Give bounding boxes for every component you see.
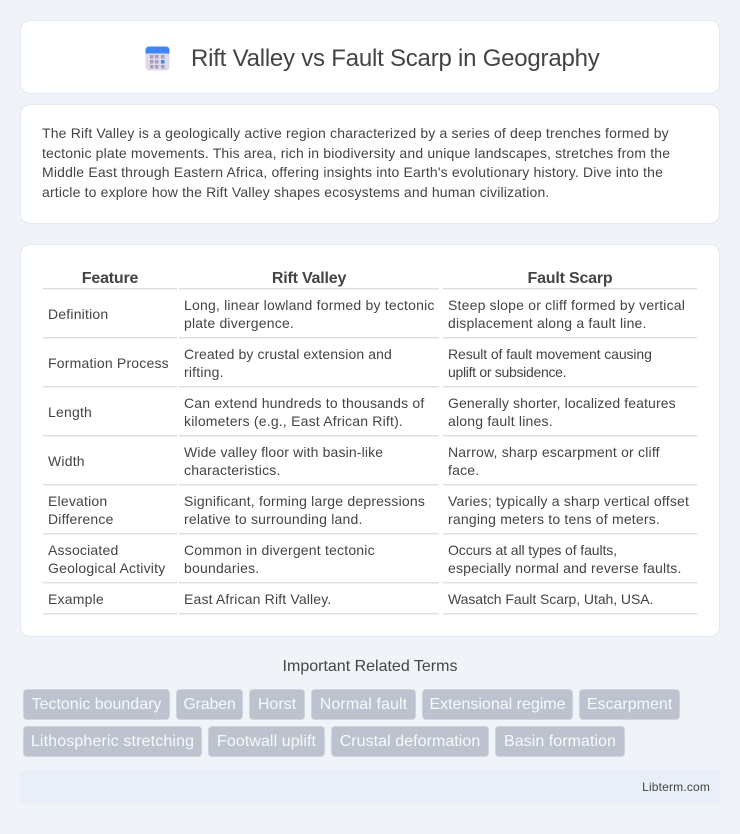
text block: introduction (42, 125, 670, 200)
title: Rift Valley vs Fault Scarp in Geography (191, 45, 600, 72)
text block: introduction: Middle East through Eastern Africa, offering insights into Earth's evolutionary history. Dive into the (42, 164, 663, 180)
tags: related terms (23, 689, 680, 757)
tag (249, 689, 305, 720)
panel: comparison table: relative to surrounding land. (184, 511, 363, 527)
panel: comparison table: Wide valley floor with basin-like (184, 444, 383, 460)
panel: comparison table: uplift or subsidence. (448, 364, 566, 380)
tag (311, 689, 416, 720)
footer (20, 770, 720, 804)
panel: comparison table: Common in divergent tectonic (184, 542, 375, 558)
panel: comparison table: Significant, forming large depressions (184, 493, 425, 509)
table heading: Fault Scarp: Fault Scarp (528, 270, 612, 287)
panel: comparison table: kilometers (e.g., East African Rift). (184, 413, 403, 429)
panel: comparison table: ranging meters to tens of meters. (448, 511, 660, 527)
tag: Crustal deformation (340, 733, 480, 750)
panel: comparison table (20, 244, 720, 637)
tag: Normal fault (320, 696, 407, 713)
heading: Important Related Terms: Important Related Terms (283, 658, 457, 675)
row: Associated Geological Activity: Geological Activity (48, 560, 165, 576)
icon: calendar (146, 46, 170, 70)
panel: comparison table: Wasatch Fault Scarp, Utah, USA. (448, 591, 653, 607)
row: Associated Geological Activity (48, 542, 166, 576)
tag: Lithospheric stretching (31, 733, 194, 750)
text block: introduction: The Rift Valley is a geologically active region characterized by a series of deep trenches formed by (42, 125, 669, 141)
panel: comparison table: Result of fault movement causing (448, 346, 652, 362)
tag: Horst (258, 696, 296, 713)
row: Elevation Difference (48, 493, 114, 527)
panel: comparison table: Occurs at all types of faults, (448, 542, 617, 558)
panel: comparison table: face. (448, 462, 479, 478)
tag (331, 726, 489, 757)
panel: comparison table: Created by crustal extension and (184, 346, 392, 362)
tag (208, 726, 325, 757)
panel: comparison table: Narrow, sharp escarpment or cliff (448, 444, 660, 460)
panel: comparison table: characteristics. (184, 462, 281, 478)
row: Length: Length (48, 404, 92, 420)
tag (422, 689, 573, 720)
tag: Footwall uplift (217, 733, 316, 750)
tag: Graben (183, 696, 236, 713)
row: Formation Process: Formation Process (48, 355, 169, 371)
tag: Extensional regime (429, 696, 566, 713)
panel: comparison table: Varies; typically a sharp vertical offset (448, 493, 689, 509)
text block: introduction: tectonic plate movements. This area, rich in biodiversity and unique landscapes, stretches from the (42, 145, 670, 161)
panel: introduction (20, 104, 720, 224)
row: Elevation Difference: Difference (48, 511, 114, 527)
panel: title header (20, 20, 720, 94)
panel: comparison table: East African Rift Valley. (184, 591, 331, 607)
row: Associated Geological Activity: Associated (48, 542, 118, 558)
text block: introduction: article to explore how the Rift Valley shapes ecosystems and human civilization. (42, 184, 549, 200)
panel: comparison table: boundaries. (184, 560, 259, 576)
tag (23, 689, 170, 720)
panel: comparison table: along fault lines. (448, 413, 553, 429)
row: Elevation Difference: Elevation (48, 493, 107, 509)
row: Example: Example (48, 591, 104, 607)
row: Width: Width (48, 453, 85, 469)
panel: comparison table: plate divergence. (184, 315, 294, 331)
panel: comparison table: rifting. (184, 364, 224, 380)
tag (495, 726, 625, 757)
panel: comparison table: Long, linear lowland formed by tectonic (184, 297, 435, 313)
tag: Basin formation (504, 733, 616, 750)
tag (176, 689, 243, 720)
tag (579, 689, 680, 720)
tag: Tectonic boundary (32, 696, 161, 713)
table heading: Feature: Feature (82, 270, 138, 287)
footer credit: Libterm.com (642, 780, 710, 794)
table heading: Rift Valley: Rift Valley (272, 270, 346, 287)
panel: comparison table: Can extend hundreds to thousands of (184, 395, 425, 411)
tag (23, 726, 202, 757)
panel: comparison table: displacement along a fault line. (448, 315, 647, 331)
panel: comparison table: especially normal and reverse faults. (448, 560, 682, 576)
panel: comparison table: Steep slope or cliff formed by vertical (448, 297, 685, 313)
row: Definition: Definition (48, 306, 108, 322)
panel: comparison table: Generally shorter, localized features (448, 395, 676, 411)
tag: Escarpment (587, 696, 672, 713)
